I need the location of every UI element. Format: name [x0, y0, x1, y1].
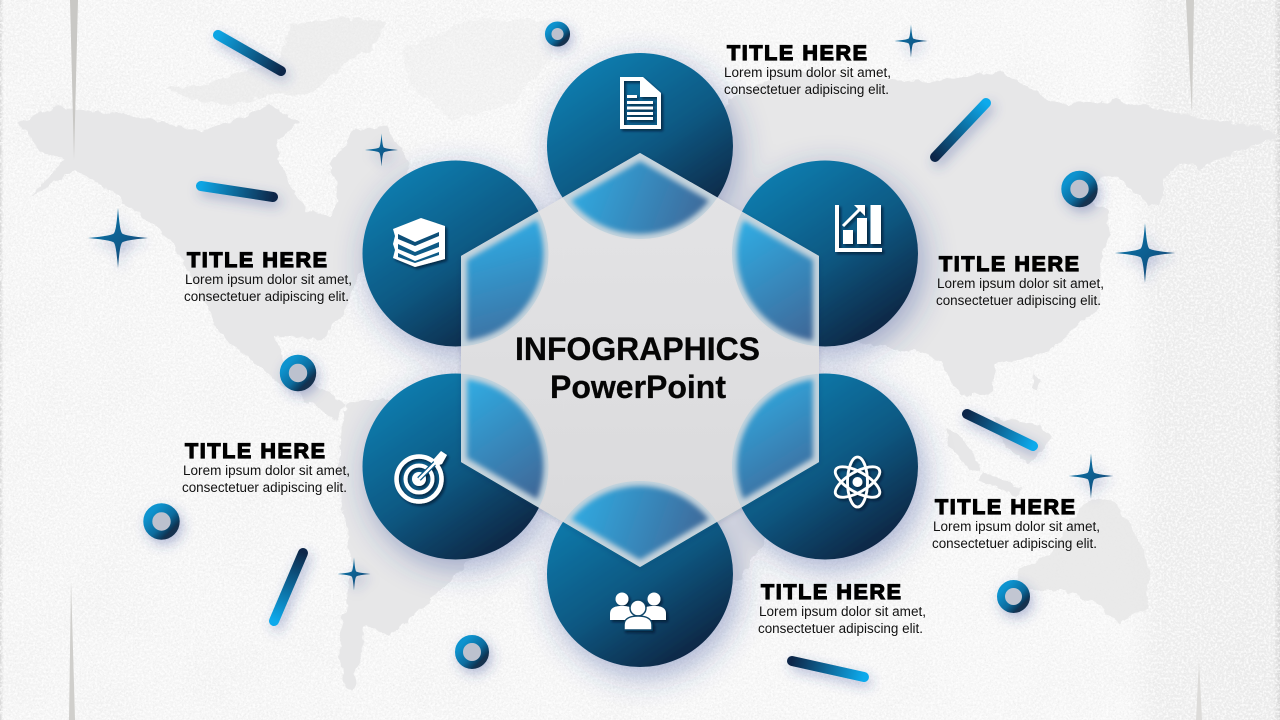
bar 5 [274, 553, 303, 621]
center heading: INFOGRAPHICS [515, 331, 760, 367]
circle 3 lower right [732, 374, 918, 560]
text block: upper right [936, 252, 1104, 308]
text block: lower left [182, 439, 350, 495]
bar 2 [201, 186, 273, 197]
bar 3 [935, 103, 986, 157]
circle ring [362, 53, 918, 667]
text block: lower right: Lorem ipsum dolor sit amet, [933, 519, 1100, 534]
blurred blue segments [462, 158, 818, 564]
icon: document [620, 77, 661, 129]
ring bottom [459, 639, 485, 665]
center heading: PowerPoint [550, 369, 726, 405]
icon: atom [831, 457, 884, 507]
text block: lower right [932, 495, 1100, 551]
ring lower right [1001, 584, 1026, 609]
icon: books [393, 218, 445, 267]
text block: top: consectetuer adipiscing elit. [724, 82, 889, 97]
map: africa [600, 340, 800, 590]
text block: top: Lorem ipsum dolor sit amet, [724, 65, 891, 80]
icon: people [610, 592, 666, 630]
ring top [548, 25, 567, 43]
text block: bottom [758, 580, 926, 636]
map: southeast asia islands [947, 373, 1052, 496]
map: australia [1013, 498, 1150, 622]
ring left middle [284, 359, 312, 387]
map: eurasia [700, 70, 1280, 397]
text block: lower left: consectetuer adipiscing elit. [182, 480, 347, 495]
pale circle halos seen through glass [461, 153, 819, 567]
ring right [1066, 175, 1093, 203]
map: arctic islands [165, 18, 385, 105]
frosted hexagon [459, 153, 821, 567]
ring lower left [148, 508, 175, 535]
text block: top [724, 41, 891, 97]
text block: upper left: Lorem ipsum dolor sit amet, [185, 272, 352, 287]
map: south america [338, 400, 470, 692]
decorative rings [148, 25, 1093, 665]
star top [894, 24, 928, 58]
decorative stars [88, 24, 1175, 590]
circle 1 top [547, 53, 733, 239]
hexagon glass panel [461, 153, 819, 567]
text block: top: TITLE HERE [727, 41, 867, 65]
circle 4 bottom [547, 481, 733, 667]
star left large [88, 208, 148, 268]
text block: lower right: TITLE HERE [935, 495, 1075, 519]
star upper left [365, 134, 398, 166]
circle 5 lower left [362, 374, 548, 560]
text block: lower left: TITLE HERE [185, 439, 325, 463]
icon: target [396, 451, 447, 502]
star right small [1068, 454, 1114, 498]
text block: bottom: Lorem ipsum dolor sit amet, [759, 604, 926, 619]
map: north america [18, 105, 410, 420]
star right large [1115, 223, 1175, 283]
circle 6 upper left [362, 160, 548, 346]
decorative bars [201, 35, 1033, 677]
text block: upper left: consectetuer adipiscing elit. [184, 289, 349, 304]
text block: upper right: TITLE HERE [939, 252, 1079, 276]
map: greenland [400, 20, 560, 120]
bar 6 [792, 661, 864, 677]
icon: bar chart [835, 205, 882, 252]
text block: lower right: consectetuer adipiscing elit. [932, 536, 1097, 551]
text block: bottom: consectetuer adipiscing elit. [758, 621, 923, 636]
star lower left [338, 558, 370, 590]
text block: upper left: TITLE HERE [187, 248, 327, 272]
center heading [515, 331, 760, 405]
bar 1 [218, 35, 281, 71]
text block: bottom: TITLE HERE [761, 580, 901, 604]
text block: upper right: consectetuer adipiscing elit. [936, 293, 1101, 308]
bar 4 [967, 414, 1033, 446]
circle 2 upper right [732, 160, 918, 346]
text block: upper left [184, 248, 352, 304]
text block: lower left: Lorem ipsum dolor sit amet, [183, 463, 350, 478]
text block: upper right: Lorem ipsum dolor sit amet, [937, 276, 1104, 291]
